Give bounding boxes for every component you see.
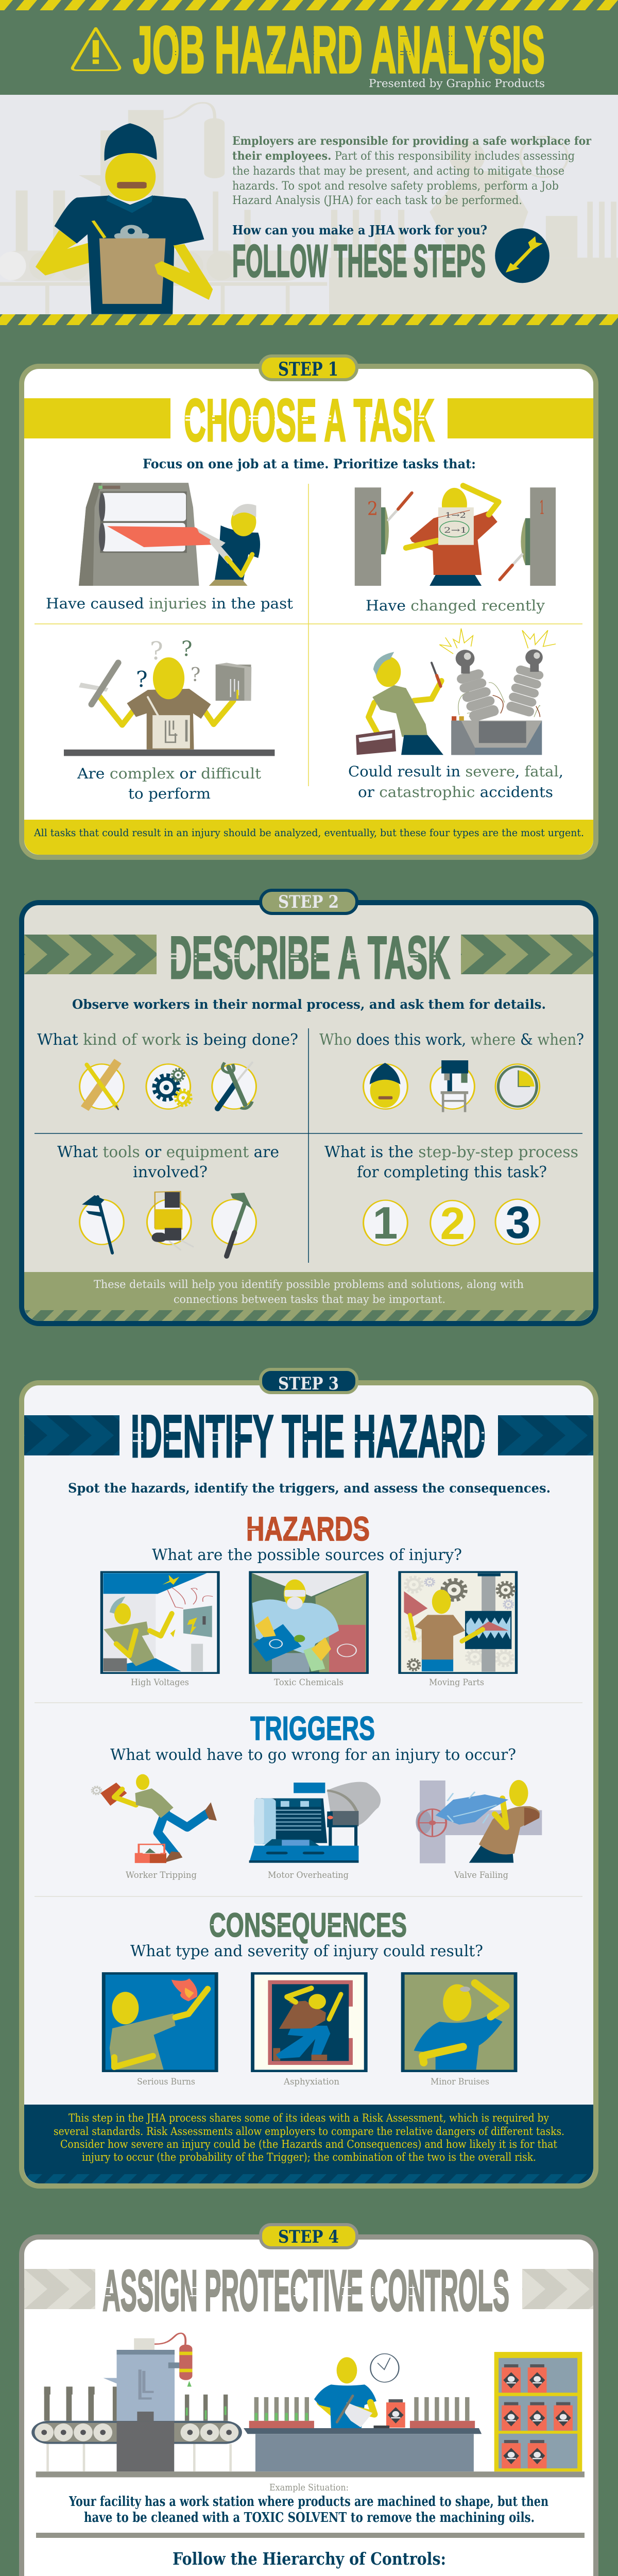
caption: changed: Have changed recently [366, 597, 545, 614]
caption: Moving Parts [429, 1677, 484, 1688]
heading: choose a task [184, 386, 435, 454]
icons: numbered steps [364, 1197, 540, 1249]
panel: step 3 identify the hazard [22, 1369, 596, 2186]
factory silhouette [0, 103, 618, 314]
illustration: changed procedure [355, 486, 556, 586]
example label: Example Situation: [269, 2482, 349, 2493]
illustration: complex task [64, 637, 274, 756]
intro paragraph: Employers are responsible for providing a safe workplace for [232, 134, 591, 148]
question: tools: What tools or equipment are [57, 1143, 279, 1161]
intro background [0, 95, 618, 315]
heading: triggers: TRIGGERS [250, 1709, 375, 1747]
illustration: motor overheating [249, 1782, 381, 1863]
caption: Serious Burns [137, 2077, 195, 2087]
subtitle: Presented by Graphic Products [369, 77, 545, 90]
illustration: machine injury [79, 483, 260, 586]
intro section [0, 95, 618, 325]
subheading: consequences question: What type and severity of injury could result? [130, 1942, 483, 1960]
subheading: hazards question: What are the possible sources of injury? [152, 1546, 462, 1564]
example text: have to be cleaned with a TOXIC SOLVENT to remove the machining oils. [84, 2510, 535, 2526]
illustration: worker tripping [92, 1774, 217, 1863]
intro paragraph [232, 134, 591, 207]
heading: describe a task [169, 924, 450, 991]
icon: arrow in circle [495, 228, 550, 283]
lead text: Spot the hazards, identify the triggers, and assess the consequences. [68, 1481, 551, 1496]
heading: consequences: CONSEQUENCES [209, 1906, 407, 1944]
caption: complex: Are complex or difficult [77, 765, 262, 782]
caption: Valve Failing [454, 1870, 508, 1880]
lead text: Focus on one job at a time. Prioritize tasks that: [143, 456, 476, 471]
illustration: complex task: ? [150, 637, 163, 666]
footer note: This step in the JHA process shares some of its ideas with a Risk Assessment, which is required by [68, 2112, 549, 2124]
top hazard stripes [0, 0, 618, 10]
question: tools [57, 1143, 279, 1181]
icons: who where when [364, 1060, 540, 1112]
illustration: catastrophic accident [356, 629, 556, 755]
footer note: These details will help you identify possible problems and solutions, along with [94, 1278, 524, 1291]
panel border [22, 366, 596, 857]
example text [68, 2494, 548, 2526]
badge: step 3: STEP 3 [278, 1374, 339, 1394]
caption: severe [348, 763, 563, 801]
badge: step 2 [261, 890, 357, 913]
caption: Minor Bruises [431, 2077, 489, 2087]
caption: High Voltages [131, 1677, 189, 1688]
question: process [324, 1143, 578, 1181]
panel body [22, 903, 596, 1324]
chevron bands [24, 2269, 593, 2309]
image: minor bruises [403, 1973, 516, 2071]
badge: step 1 [260, 356, 357, 380]
question: kind of work: What kind of work is being done? [37, 1031, 298, 1049]
illustration: valve failing [416, 1780, 542, 1863]
panel body [22, 1383, 596, 2186]
badge: step 3 [261, 1369, 357, 1394]
illustration: complex task: ? [191, 665, 200, 686]
header banner [0, 0, 618, 90]
panel: step 1 choose a task [22, 356, 596, 857]
panel border [22, 903, 596, 1324]
panel body [22, 2237, 596, 2576]
badge: step 4 [261, 2225, 357, 2248]
panel body [22, 366, 596, 857]
image: asphyxiation [253, 1973, 366, 2071]
image: toxic chemicals [250, 1572, 367, 1673]
icons: numbered steps: 2 [440, 1198, 465, 1249]
question: who where when: Who does this work, where & when? [319, 1031, 584, 1049]
caption: complex [77, 765, 262, 802]
caption: Asphyxiation [283, 2077, 339, 2087]
caption: Motor Overheating [268, 1870, 349, 1880]
footer note: Consider how severe an injury could be (the Hazards and Consequences) and how likely it is for that [60, 2138, 558, 2150]
caption: Worker Tripping [126, 1870, 197, 1880]
icon: warning triangle [73, 28, 119, 70]
panel border [22, 1383, 596, 2186]
illustration: changed procedure: 1→2 [445, 511, 466, 520]
question line: How can you make a JHA work for you? [232, 223, 487, 238]
footer note [24, 2105, 593, 2184]
illustration: changed procedure: 1 [539, 498, 545, 519]
illustration: changed procedure: 2 [367, 499, 378, 520]
image: moving parts [400, 1572, 517, 1673]
badge: step 2: STEP 2 [278, 892, 339, 912]
intro paragraph: Hazard Analysis (JHA) for each task to be performed. [232, 194, 522, 207]
illustration: changed procedure: 2→1 [444, 526, 467, 535]
footer note: injury to occur (the probability of the Trigger); the combination of the two is the overall risk. [82, 2151, 536, 2163]
panel: step 2 describe a task [22, 890, 596, 1324]
question: process: for completing this task? [357, 1163, 547, 1181]
intro paragraph: their employees. Part of this responsibility includes assessing [232, 149, 575, 163]
caption: injuries: Have caused injuries in the past [46, 595, 294, 612]
panel border [22, 2237, 596, 2576]
icons: kinds of work [80, 1059, 256, 1111]
intro paragraph: hazards. To spot and resolve safety problems, perform a Job [232, 180, 559, 193]
image: high voltages [101, 1572, 218, 1673]
footer note: connections between tasks that may be important. [174, 1293, 445, 1306]
caption: severe: Could result in severe, fatal, [348, 763, 563, 780]
caption: severe: or catastrophic accidents [358, 784, 553, 801]
footer note: several standards. Risk Assessments allow employers to compare the relative dangers of different tasks. [54, 2125, 564, 2138]
footer note: All tasks that could result in an injury should be analyzed, eventually, but these four types are the most urgent. [33, 826, 584, 839]
subheading: triggers question: What would have to go wrong for an injury to occur? [110, 1746, 516, 1764]
panel: step 4 assign protective controls [22, 2225, 596, 2576]
footer note [24, 820, 593, 855]
caption: Toxic Chemicals [274, 1677, 344, 1688]
image: serious burns [104, 1973, 216, 2071]
caption: complex: to perform [128, 785, 211, 802]
lead text: Observe workers in their normal process, and ask them for details. [72, 997, 546, 1012]
question: process: What is the step-by-step process [324, 1143, 578, 1161]
illustration: work station [31, 2333, 585, 2477]
illustration: worker with clipboard [36, 123, 213, 314]
illustration: complex task: ? [136, 667, 148, 692]
heading: hierarchy of controls: Follow the Hierarchy of Controls: [173, 2549, 446, 2569]
icons: numbered steps: 1 [373, 1197, 398, 1248]
icons: numbered steps: 3 [506, 1197, 530, 1248]
illustration: complex task: ? [181, 637, 192, 661]
chevron bands [24, 935, 593, 974]
icons: tools and equipment [80, 1192, 256, 1256]
title band [24, 398, 593, 438]
badge: step 4: STEP 4 [278, 2227, 339, 2247]
lower hazard stripes [0, 314, 618, 325]
intro paragraph: the hazards that may be present, and acting to mitigate those [232, 165, 564, 178]
heading: hazards: HAZARDS [246, 1510, 370, 1548]
question: tools: involved? [133, 1163, 208, 1181]
badge: step 1: STEP 1 [278, 359, 338, 380]
footer note [24, 1272, 593, 1321]
chevron bands [24, 1415, 593, 1455]
